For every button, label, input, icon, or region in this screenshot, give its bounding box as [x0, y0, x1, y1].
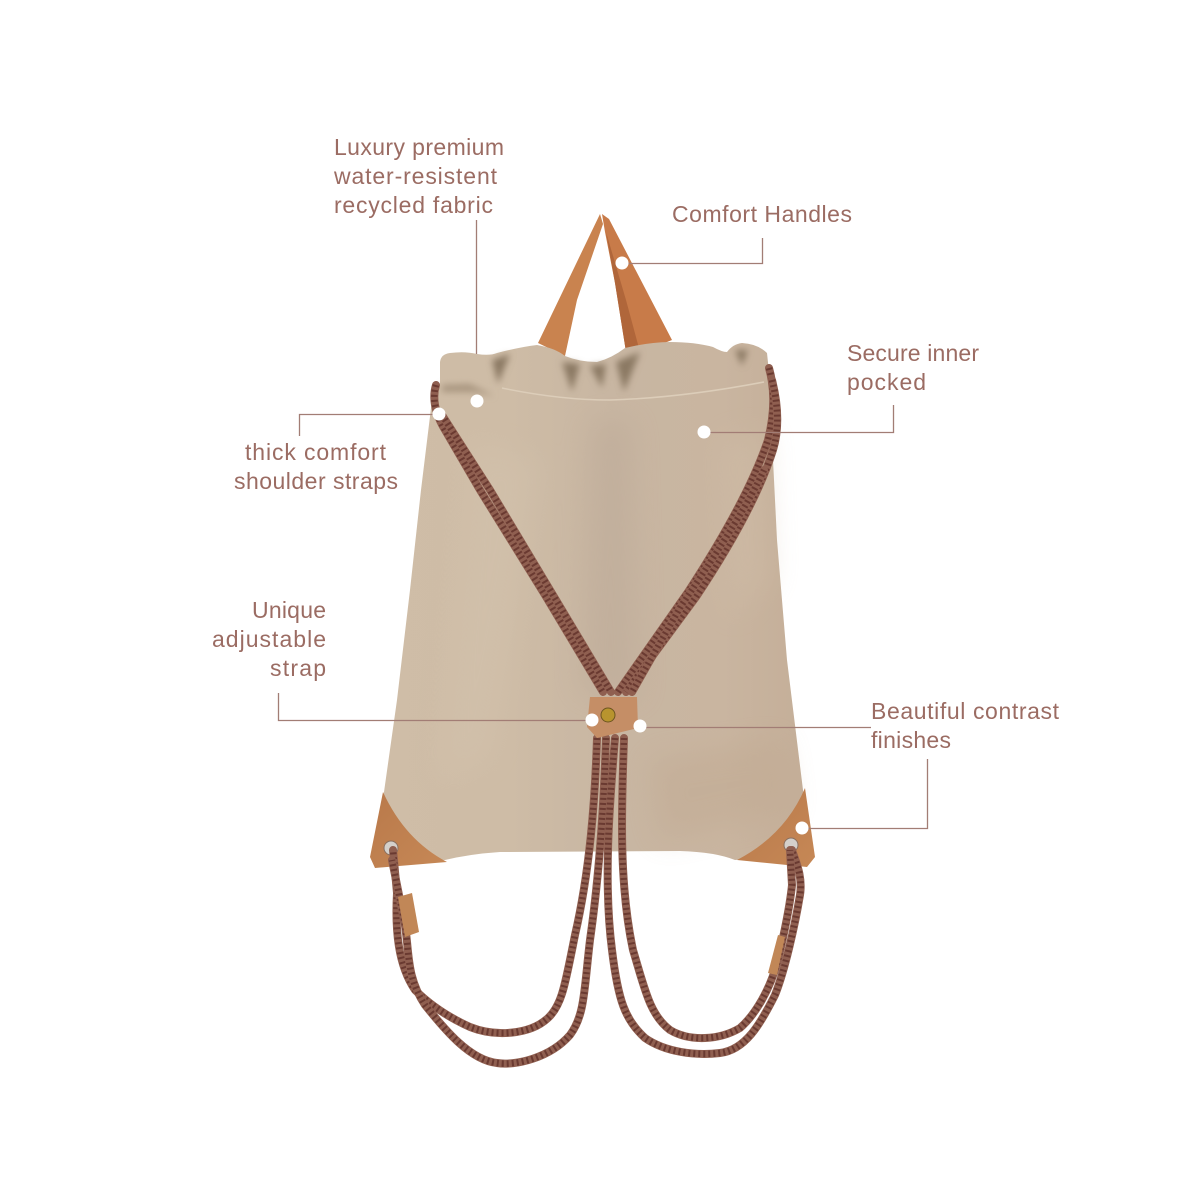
bag illustration — [370, 214, 815, 1064]
label: shoulder straps: thick comfort — [245, 439, 387, 465]
cord stopper right — [768, 935, 785, 975]
lower right cords — [608, 738, 801, 1054]
label: adjustable strap: strap — [270, 655, 326, 681]
leader lines — [278, 220, 928, 828]
label: fabric: water-resistent — [333, 163, 498, 189]
label: adjustable strap: Unique — [252, 597, 326, 623]
label: handles: Comfort Handles — [672, 201, 852, 227]
bag body — [374, 342, 810, 860]
label: contrast finishes: finishes — [871, 727, 951, 753]
label: pocket: pocked — [847, 369, 926, 395]
brass rivet — [601, 708, 615, 722]
label: pocket — [847, 340, 979, 395]
label: fabric: recycled fabric — [334, 192, 493, 218]
label: contrast finishes — [871, 698, 1060, 753]
right handle strap — [602, 214, 672, 358]
drawstring gathers — [442, 350, 748, 396]
label: adjustable strap — [212, 597, 326, 681]
label: fabric: Luxury premium — [334, 134, 504, 160]
left handle strap — [538, 214, 603, 356]
label: shoulder straps — [234, 439, 398, 494]
corner patch right — [737, 788, 815, 867]
label: fabric — [333, 134, 504, 218]
eyelet left — [384, 841, 398, 855]
eyelet right — [784, 838, 798, 852]
cord stopper left — [398, 893, 419, 937]
lower left cords — [392, 738, 606, 1064]
leather slider — [587, 697, 638, 738]
corner patch left — [370, 792, 447, 868]
upper right cords — [618, 368, 777, 692]
fabric shading — [440, 420, 790, 840]
callout dots — [432, 256, 808, 834]
right handle inner fold — [606, 232, 640, 358]
upper left cords — [434, 385, 611, 692]
label: shoulder straps: shoulder straps — [234, 468, 398, 494]
casing seam — [502, 382, 764, 400]
label: pocket: Secure inner — [847, 340, 979, 366]
label: adjustable strap: adjustable — [212, 626, 326, 652]
label: contrast finishes: Beautiful contrast — [871, 698, 1060, 724]
